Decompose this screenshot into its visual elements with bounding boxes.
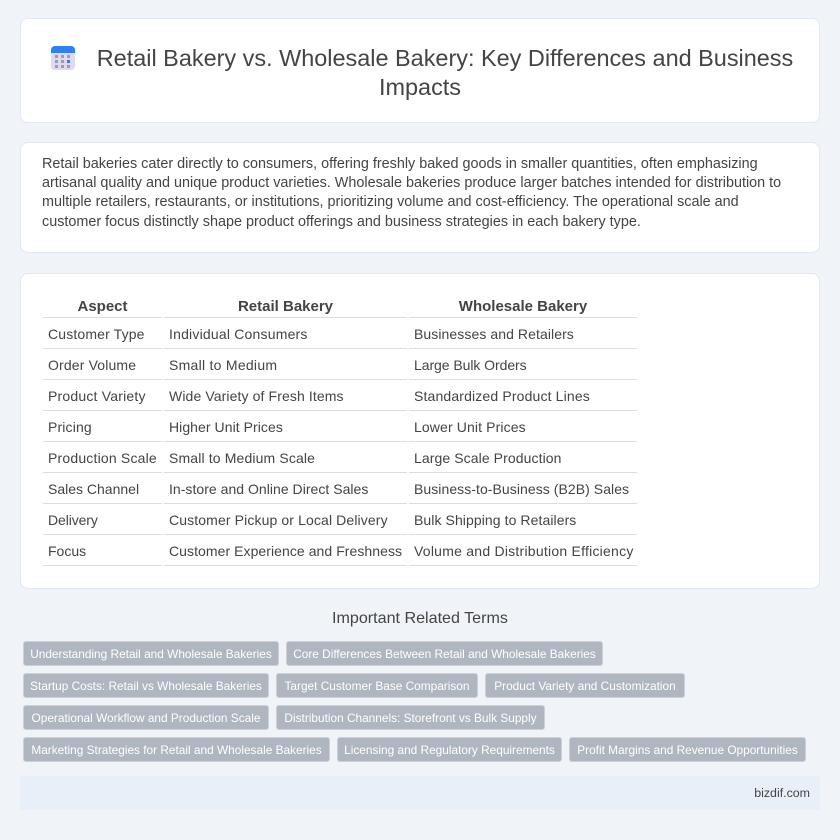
title bbox=[97, 45, 793, 100]
comparison table: Bulk Shipping to Retailers bbox=[414, 512, 576, 528]
comparison table: Small to Medium Scale bbox=[169, 450, 315, 466]
text block: introduction: Retail bakeries cater directly to consumers, offering freshly baked goods in smaller quantities, often emphasizing bbox=[42, 156, 758, 172]
related term chips: Target Customer Base Comparison bbox=[284, 679, 469, 693]
related term chips: Product Variety and Customization bbox=[494, 679, 676, 693]
panel: title header bbox=[20, 18, 820, 123]
text block: introduction: customer focus distinctly shape product offerings and business strategies in each bakery type. bbox=[42, 214, 641, 230]
comparison table: Sales Channel bbox=[48, 481, 139, 497]
related term chips: Operational Workflow and Production Scale bbox=[32, 711, 260, 725]
comparison table: Individual Consumers bbox=[169, 326, 308, 342]
comparison table: Business-to-Business (B2B) Sales bbox=[414, 481, 629, 497]
comparison table bbox=[43, 298, 637, 566]
comparison table: Customer Experience and Freshness bbox=[169, 543, 402, 559]
comparison table: Pricing bbox=[48, 419, 92, 435]
heading: important related terms: Important Related Terms bbox=[332, 609, 508, 627]
related term chips: Core Differences Between Retail and Wholesale Bakeries bbox=[293, 647, 596, 661]
related term chips: Profit Margins and Revenue Opportunities bbox=[577, 743, 798, 757]
comparison table: Lower Unit Prices bbox=[414, 419, 526, 435]
related term chips: Startup Costs: Retail vs Wholesale Bakeries bbox=[30, 679, 262, 693]
text block: introduction bbox=[42, 156, 781, 230]
comparison table: Product Variety bbox=[48, 388, 146, 404]
comparison table: Standardized Product Lines bbox=[414, 388, 590, 404]
comparison table: Aspect bbox=[77, 298, 128, 315]
comparison table: In-store and Online Direct Sales bbox=[169, 481, 368, 497]
comparison table: Small to Medium bbox=[169, 357, 277, 373]
icon: calendar bbox=[51, 46, 75, 70]
comparison table: Order Volume bbox=[48, 357, 136, 373]
panel: introduction bbox=[20, 142, 820, 253]
comparison table: Production Scale bbox=[48, 450, 157, 466]
comparison table: Wholesale Bakery bbox=[459, 298, 587, 315]
comparison table: Volume and Distribution Efficiency bbox=[414, 543, 634, 559]
related term chips: Marketing Strategies for Retail and Wholesale Bakeries bbox=[31, 743, 322, 757]
comparison table: Customer Type bbox=[48, 326, 145, 342]
text block: introduction: artisanal quality and unique product varieties. Wholesale bakeries produce larger batches intended for distribution to bbox=[42, 175, 781, 191]
related term chips bbox=[23, 641, 806, 762]
comparison table: Businesses and Retailers bbox=[414, 326, 574, 342]
panel: comparison table bbox=[20, 273, 820, 589]
comparison table: Large Scale Production bbox=[414, 450, 562, 466]
comparison table: Retail Bakery bbox=[238, 298, 333, 315]
related term chips: Licensing and Regulatory Requirements bbox=[344, 743, 555, 757]
comparison table: Large Bulk Orders bbox=[414, 357, 527, 373]
title: Retail Bakery vs. Wholesale Bakery: Key Differences and Business bbox=[97, 45, 793, 71]
title: Impacts bbox=[379, 74, 461, 100]
footer text: bizdif.com bbox=[754, 786, 810, 800]
comparison table: Customer Pickup or Local Delivery bbox=[169, 512, 388, 528]
footer bar bbox=[20, 776, 820, 810]
comparison table: Higher Unit Prices bbox=[169, 419, 283, 435]
text block: introduction: multiple retailers, restaurants, or institutions, prioritizing volume and cost-efficiency. The operational scale and bbox=[42, 194, 739, 210]
related term chips: Distribution Channels: Storefront vs Bulk Supply bbox=[284, 711, 537, 725]
comparison table: Focus bbox=[48, 543, 86, 559]
comparison table: Wide Variety of Fresh Items bbox=[169, 388, 344, 404]
comparison table: Delivery bbox=[48, 512, 98, 528]
related term chips: Understanding Retail and Wholesale Bakeries bbox=[30, 647, 272, 661]
